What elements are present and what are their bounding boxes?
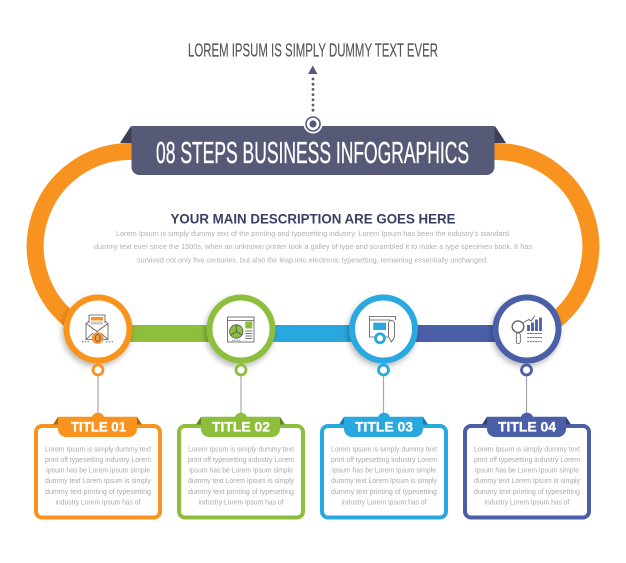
panel: title 01: dummy text printing of typesetting: [45, 489, 151, 496]
icon: envelope with bug: [82, 315, 114, 344]
step 1 connector: [93, 365, 103, 416]
arrow: dotted up arrow: [308, 66, 318, 113]
panel: title 02: industry Lorem Ipsum has of: [198, 500, 284, 506]
right orange arc: [491, 152, 591, 320]
panel: title 04: industry Lorem Ipsum has of: [484, 500, 570, 506]
step 3 connector: [378, 365, 388, 416]
panel: title 02: print off typesetting industry Lorem: [188, 457, 294, 464]
target marker: [304, 114, 322, 134]
panel: title 03: print off typesetting industry Lorem: [331, 457, 437, 464]
panel: title 01: Lorem Ipsum is simply dummy text: [45, 446, 151, 454]
panel: title 02: dummy text printing of typesetting: [188, 489, 294, 496]
connector bar: navy: [414, 325, 496, 342]
panel: title 03: dummy text printing of typesetting: [331, 489, 437, 496]
panel: title 04: Ipsum has be Lorem Ipsum simple: [475, 468, 579, 474]
main description text: Lorem Ipsum is simply dummy text of the printing and typesetting industry. Lorem Ipsum has been the industry's standard: [116, 231, 509, 238]
panel: title 01: print off typesetting industry Lorem: [45, 457, 151, 464]
step 1 node: [64, 294, 132, 364]
panel: title 03: [322, 413, 446, 518]
panel: title 01: industry Lorem Ipsum has of: [56, 500, 141, 506]
title banner: [120, 126, 506, 175]
icon: magnifier and bars: [512, 316, 542, 344]
panel: title 02: Lorem Ipsum is simply dummy text: [188, 446, 294, 454]
panel: title 03: Ipsum has be Lorem Ipsum simple: [332, 468, 436, 474]
main description text: dummy text ever since the 1500s, when an unknown printer took a galley of type and scrambled it to make a type specimen book. It has: [94, 244, 533, 251]
panel: title 03: dummy text Lorem Ipsum is simply: [331, 478, 437, 485]
main description text: survived not only five centuries, but also the leap into electronic typesetting, remaining essentially unchanged.: [137, 258, 488, 264]
panel: title 03: Lorem Ipsum is simply dummy text: [331, 446, 437, 454]
panel: title 04: Lorem Ipsum is simply dummy text: [474, 446, 580, 454]
left orange arc: [35, 152, 135, 320]
panel: title 01: TITLE 01: [71, 418, 126, 434]
panel: title 02: [179, 413, 303, 518]
panel: title 04: dummy text printing of typesetting: [474, 489, 580, 496]
icon: chart window: [228, 317, 254, 342]
panel: title 03: industry Lorem Ipsum has of: [342, 500, 427, 506]
top caption: LOREM IPSUM IS SIMPLY DUMMY TEXT EVER: [188, 40, 438, 60]
step 2 connector: [236, 365, 246, 416]
main description text: [94, 231, 533, 264]
main description heading: YOUR MAIN DESCRIPTION ARE GOES HERE: [170, 212, 456, 226]
panel: title 02: TITLE 02: [212, 418, 270, 434]
connector bar: blue: [271, 325, 353, 342]
step 4 node: [492, 294, 562, 364]
panel: title 03: TITLE 03: [355, 418, 413, 434]
panel: title 04: print off typesetting industry Lorem: [474, 457, 580, 464]
panel: title 02: Ipsum has be Lorem Ipsum simple: [189, 468, 293, 474]
step 2 node: [206, 294, 276, 364]
panel: title 04: dummy text Lorem Ipsum is simply: [474, 478, 580, 485]
connector bar: green: [128, 325, 210, 342]
icon: settings window with pencil: [370, 316, 396, 343]
panel: title 01: Ipsum has be Lorem Ipsum simple: [46, 468, 150, 474]
step 4 connector: [522, 365, 532, 416]
step 3 node: [349, 294, 418, 364]
panel: title 04: [465, 413, 589, 518]
panel: title 01: dummy text Lorem Ipsum is simply: [45, 478, 151, 485]
panel: title 04: TITLE 04: [498, 418, 556, 434]
panel: title 01: [36, 413, 160, 518]
panel: title 02: dummy text Lorem Ipsum is simply: [188, 478, 294, 485]
